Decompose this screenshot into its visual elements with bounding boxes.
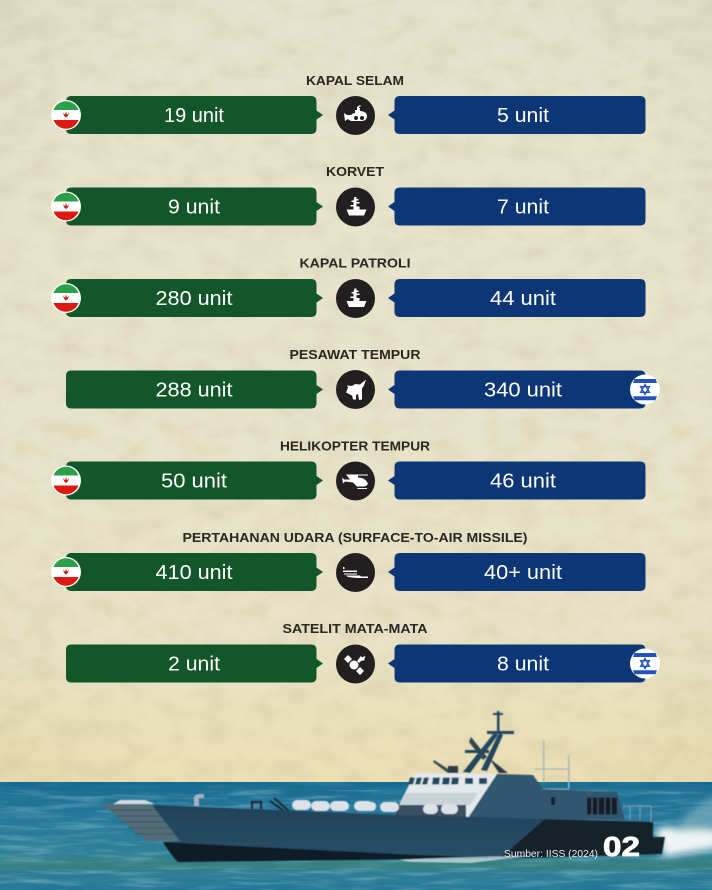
bar: Israel kapal selam (388, 96, 646, 134)
bar: Iran kapal patroli (66, 279, 323, 317)
heading: kapal patroli: KAPAL PATROLI (300, 256, 410, 270)
row: kapal patroli (51, 256, 646, 318)
icon: patrol ship (336, 279, 375, 318)
heading: pertahanan udara: PERTAHANAN UDARA (SURFACE-TO-AIR MISSILE) (182, 530, 528, 545)
bar: Iran kapal selam (66, 96, 323, 134)
bar: Iran pertahanan udara: 410 unit (156, 562, 233, 584)
bar: Israel helikopter tempur (388, 462, 646, 500)
page number: 02 (603, 831, 640, 862)
bar: Iran pesawat tempur (66, 370, 323, 408)
bar: Israel pesawat tempur: 340 unit (484, 380, 562, 402)
bar: Iran helikopter tempur (66, 462, 323, 500)
bar: Iran pesawat tempur: 288 unit (156, 380, 233, 402)
antennas (543, 740, 544, 782)
flag: Iran (51, 283, 81, 313)
bar: Israel helikopter tempur: 46 unit (490, 470, 556, 492)
dark hull stern (500, 819, 665, 858)
bar: Israel pertahanan udara: 40+ unit (484, 562, 562, 584)
bar: Israel kapal patroli: 44 unit (490, 288, 556, 310)
row: helikopter tempur (51, 438, 646, 500)
row: kapal selam (51, 73, 646, 135)
row: satelit mata-mata (66, 621, 660, 684)
row: korvet (51, 164, 646, 226)
bar: Iran kapal selam: 19 unit (164, 105, 224, 127)
bar: Iran pertahanan udara (66, 553, 323, 591)
icon: helicopter (336, 462, 375, 500)
bar: Iran satelit (66, 644, 323, 682)
flag: Iran (51, 100, 81, 130)
icon: corvette (336, 188, 375, 226)
hull keel (163, 842, 520, 862)
icon: fighter jet (336, 370, 375, 409)
bar: Israel pertahanan udara (388, 553, 646, 591)
flag: Iran (51, 192, 81, 222)
bar: Iran helikopter tempur: 50 unit (161, 470, 227, 492)
icon: satellite (336, 644, 375, 684)
flag: Israel (630, 648, 660, 678)
sea (0, 782, 712, 890)
bar: Iran satelit: 2 unit (168, 654, 220, 676)
bar: Iran korvet (66, 188, 323, 226)
deck gear and cylinders (194, 794, 204, 806)
heading: korvet: KORVET (326, 164, 384, 179)
bar: Israel pesawat tempur (388, 370, 646, 408)
bar: Israel korvet (388, 188, 646, 226)
row: pesawat tempur (66, 347, 660, 409)
bar: Israel satelit (388, 644, 646, 682)
ship photo (101, 711, 712, 863)
heading: helikopter tempur: HELIKOPTER TEMPUR (280, 438, 431, 454)
source note: Sumber: IISS (2024) (504, 848, 598, 860)
bar: Israel kapal patroli (388, 279, 646, 317)
wake and spray (655, 795, 712, 857)
bar: Israel korvet: 7 unit (497, 196, 549, 218)
bar: Iran kapal patroli: 280 unit (156, 288, 233, 310)
mast (433, 711, 514, 773)
icon: submarine (336, 96, 375, 135)
flag: Israel (630, 374, 660, 404)
heading: satelit mata-mata: SATELIT MATA-MATA (282, 621, 428, 636)
white superstructure (396, 773, 500, 818)
bow wave (400, 856, 530, 863)
icon: missile launcher (336, 553, 375, 592)
flag: Iran (51, 557, 81, 587)
bar: Israel kapal selam: 5 unit (497, 105, 549, 127)
flag: Iran (51, 466, 81, 496)
bar: Israel satelit: 8 unit (497, 654, 549, 676)
heading: kapal selam: KAPAL SELAM (306, 73, 404, 88)
row: pertahanan udara (51, 530, 646, 592)
hull (152, 805, 546, 860)
bar: Iran korvet: 9 unit (168, 196, 220, 218)
bridge windows (408, 778, 487, 784)
bow ramp (101, 803, 180, 841)
heading: pesawat tempur: PESAWAT TEMPUR (290, 347, 421, 362)
grey-blue superstructure (468, 774, 625, 820)
